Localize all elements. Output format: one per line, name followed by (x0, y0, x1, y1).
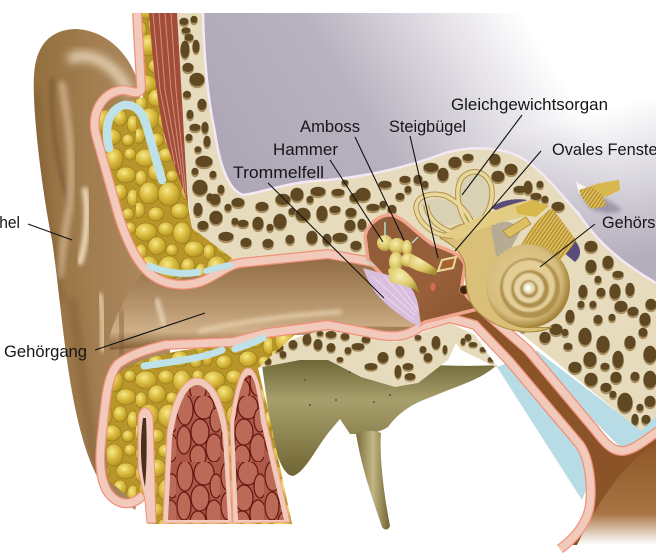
lower skull base with mastoid (262, 359, 497, 476)
panel: lower bone band (258, 323, 498, 387)
detached cochlea fragment (576, 180, 622, 213)
ligaments (365, 222, 418, 266)
bone pores lower (265, 330, 494, 381)
skin band: lower canal wall and earlobe (100, 318, 591, 549)
vestibule body (440, 222, 552, 332)
bone pores (180, 16, 656, 426)
label: Gleichgewichtsorgan (451, 96, 608, 195)
label: Amboss: Amboss (300, 118, 360, 136)
ossicles (365, 222, 456, 293)
cavity opening (460, 286, 468, 294)
label: Steigbügel (389, 118, 466, 258)
styloid process (356, 431, 390, 530)
label: Steigbügel: Steigbügel (389, 118, 466, 136)
skin band: upper channel wall (471, 300, 656, 451)
label: Trommelfell (233, 164, 384, 298)
label: Gehörgang (4, 313, 205, 361)
tissue: brown inner channel (440, 298, 656, 545)
grey inner space (491, 222, 520, 256)
hammer (377, 235, 419, 293)
label: Hammer (273, 141, 383, 242)
cartilage: blue layer along bone (536, 350, 656, 452)
label: Ovales Fenster (455, 141, 656, 251)
fat tissue: lower pad (105, 330, 300, 524)
label: Gehörgang: Gehörgang (4, 343, 87, 361)
panel: cranial cavity (203, 13, 656, 290)
muscle strip: temporal muscle (148, 13, 189, 215)
cochlea (486, 244, 570, 328)
auricle shading and highlights (36, 56, 340, 470)
dark venous patches (491, 199, 580, 262)
label: Gehörschnecke (540, 214, 656, 267)
auricle and ear canal (34, 29, 425, 510)
nerve strands (442, 200, 548, 240)
muscle: left finger (163, 378, 232, 523)
label: Hammer: Hammer (273, 141, 339, 159)
round window spot (430, 283, 436, 291)
fibre bundle (518, 208, 576, 260)
nerve cylinder (503, 217, 531, 238)
dotted nerve patch (515, 200, 549, 217)
tissue: right brown region (575, 441, 656, 545)
label: Gleichgewichtsorgan: Gleichgewichtsorgan (451, 96, 608, 114)
stirrup (438, 257, 456, 271)
panel: temporal bone (177, 13, 656, 431)
fat tissue: upper pad (97, 13, 237, 280)
cartilage: blue layer along lower canal (497, 362, 590, 500)
muscle: right finger (230, 368, 290, 523)
label: Trommelfell: Trommelfell (233, 164, 324, 182)
earlobe fold (138, 408, 156, 523)
balance organ: semicircular canals (416, 171, 493, 236)
anvil (401, 240, 437, 275)
skin band: upper (95, 13, 420, 325)
cartilage: upper blue (107, 105, 263, 366)
eardrum (363, 268, 420, 327)
label: Amboss (300, 118, 404, 240)
label: Ohrmuschel (0, 214, 72, 240)
ear canal (109, 256, 420, 350)
auditory nerve (442, 199, 580, 262)
middle ear cavity (365, 215, 482, 325)
